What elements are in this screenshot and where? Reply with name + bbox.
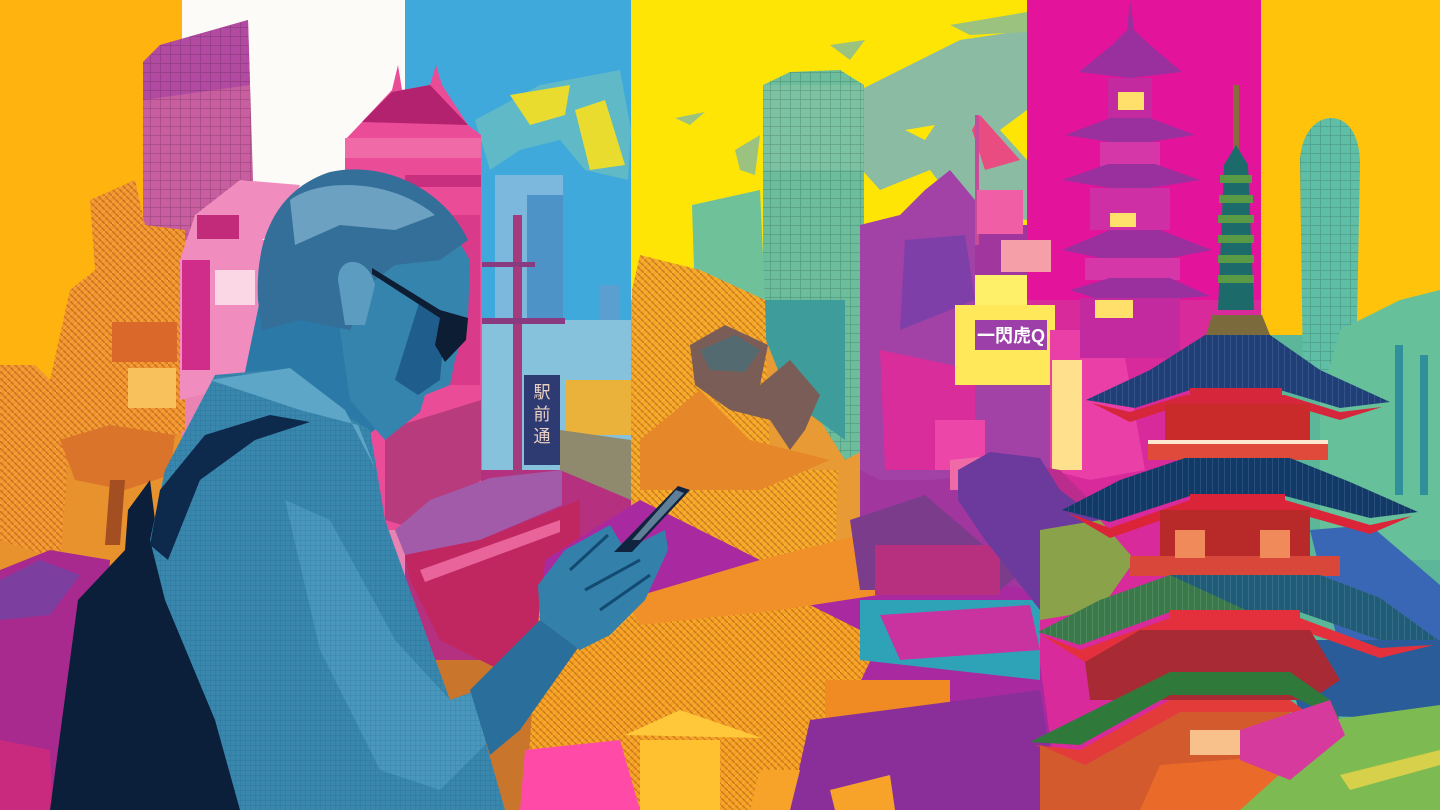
green corner bottom right [1240,700,1440,810]
pink skyscraper top left [143,20,253,240]
magenta lower-right buildings [1000,330,1145,530]
base colour fills for the lower city [0,225,1440,810]
purple and magenta foliage left [0,550,110,810]
top roof [1086,335,1390,408]
upper storey [1165,404,1310,460]
finial spire [1206,85,1270,335]
forearm [470,620,580,755]
hand [538,525,668,650]
yellow and pink signboards [955,115,1055,385]
red pagoda in foreground [1030,85,1438,810]
magenta-purple city block [860,170,1050,490]
base hall [1040,712,1300,810]
distant magenta pagoda [1062,0,1212,358]
backpack strap [150,415,310,560]
purple temple roof centre left [395,470,580,670]
lower roof [1038,575,1438,645]
hanging sign: 駅 [534,383,550,402]
right glass tower [1300,118,1360,375]
green glass tower centre [692,70,864,460]
middle storey [1160,510,1310,576]
utility pole [482,215,565,645]
hanging sign: 通 [534,427,550,446]
hanging sign [524,375,560,465]
purple tree clump [958,452,1135,620]
lower storey [1085,630,1340,700]
hanging sign: 前 [534,405,550,424]
middle roof [1062,458,1418,522]
bottom roof [1030,672,1340,745]
phone [614,486,690,552]
lower middle temple and colour wash [520,495,1060,810]
world-map splash shapes [475,12,1027,220]
ear [338,262,375,325]
orange middle collage block [631,255,838,560]
yellow and pink signboards: 一閃虎Q [977,326,1045,346]
traveller [50,169,690,810]
backpack [50,480,250,810]
green city right [1280,290,1440,720]
face [340,210,470,440]
glasses [372,268,468,362]
neck [245,270,400,445]
hair [258,169,468,330]
torso shirt [150,370,505,810]
blue towers [482,175,631,470]
dark pine trees [690,325,820,450]
pink tower behind traveller [345,65,481,530]
pink shop buildings [180,180,300,400]
orange building block left [0,180,185,560]
yellow building near pole [560,380,631,500]
left tree [60,425,175,545]
